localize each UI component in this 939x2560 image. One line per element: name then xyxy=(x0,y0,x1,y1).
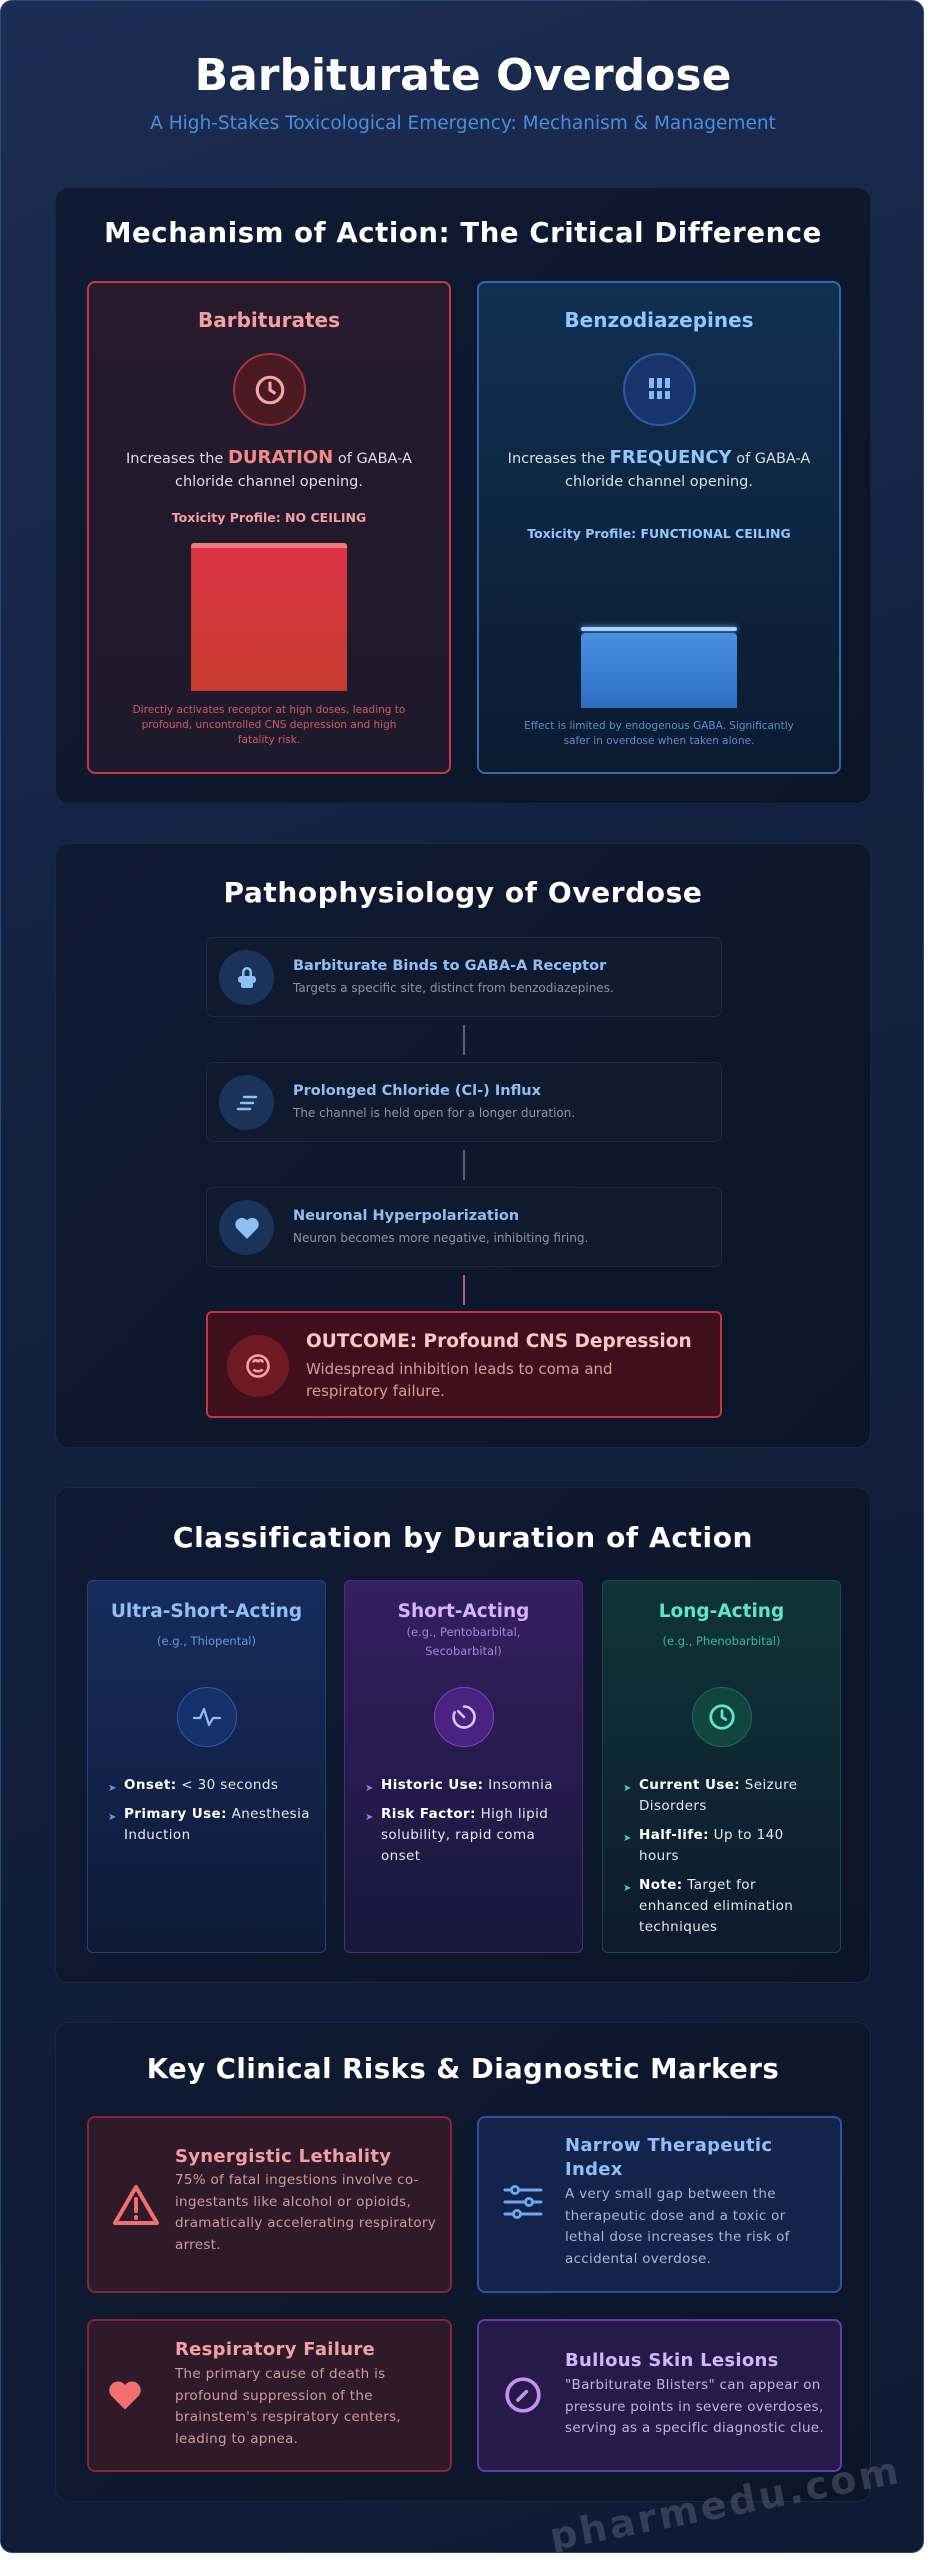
risk: synergistic lethality: 75% of fatal ingestions involve co-ingestants like alcohol or opioids, dramatically accelerating respiratory arrest. xyxy=(175,2172,436,2252)
card title: Barbiturates xyxy=(198,308,340,332)
risk: respiratory failure: Respiratory Failure xyxy=(175,2339,375,2360)
icon: timer xyxy=(434,1687,494,1747)
icon: clock xyxy=(692,1687,752,1747)
bullets xyxy=(624,1777,797,1935)
icon: sliders xyxy=(504,2185,542,2219)
bar: no ceiling xyxy=(191,543,347,691)
column: short: (e.g., Pentobarbital, xyxy=(407,1625,520,1639)
text: duration: Increases the DURATION of GABA-A xyxy=(126,447,412,468)
icon: lock xyxy=(219,950,274,1005)
note: Directly activates receptor at high doses, leading to profound, uncontrolled CNS depression and high fatality risk. xyxy=(133,704,405,746)
icon: warning xyxy=(112,2184,159,2225)
card title: Benzodiazepines xyxy=(564,308,754,332)
bullets: Half-life: Up to 140 hours xyxy=(639,1827,784,1864)
outcome box xyxy=(206,1311,722,1418)
bullets xyxy=(366,1777,553,1864)
icon: heart xyxy=(109,2382,141,2410)
risk: narrow therapeutic index: A very small gap between the therapeutic dose and a toxic or lethal dose increases the risk of accidental overdose. xyxy=(565,2186,790,2266)
step text: Prolonged Chloride (Cl-) Influx xyxy=(293,1083,541,1099)
note: Effect is limited by endogenous GABA. Significantly safer in overdose when taken alone. xyxy=(524,720,794,747)
bar: functional ceiling xyxy=(581,633,737,708)
icon: grid xyxy=(623,353,696,426)
step 3: Neuron becomes more negative, inhibiting firing. xyxy=(293,1231,588,1245)
toxicity label: Toxicity Profile: NO CEILING xyxy=(172,510,366,525)
icon: clock xyxy=(233,353,306,426)
outcome title: OUTCOME: Profound CNS Depression xyxy=(306,1331,692,1352)
icon: lines xyxy=(219,1075,274,1130)
column: long: (e.g., Phenobarbital) xyxy=(663,1634,780,1648)
risk: respiratory failure xyxy=(87,2319,452,2472)
ceiling line xyxy=(581,627,737,631)
risk: respiratory failure: The primary cause of death is profound suppression of the brainstem's respiratory centers, leading to apnea. xyxy=(175,2366,401,2446)
risk: bullous skin lesions xyxy=(477,2319,842,2472)
icon: brain xyxy=(227,1335,289,1397)
icon: heart xyxy=(219,1200,274,1255)
outcome text: Widespread inhibition leads to coma and respiratory failure. xyxy=(306,1360,613,1400)
toxicity label: Toxicity Profile: FUNCTIONAL CEILING xyxy=(527,526,791,541)
column: ultra-short xyxy=(87,1580,326,1953)
step 1: Targets a specific site, distinct from benzodiazepines. xyxy=(293,981,614,995)
bullets: Current Use: Seizure Disorders xyxy=(639,1777,797,1814)
card: benzodiazepines xyxy=(477,281,841,774)
risk: synergistic lethality: Synergistic Lethality xyxy=(175,2146,391,2167)
heading: risks: Key Clinical Risks & Diagnostic Markers xyxy=(147,2053,779,2085)
step 2: The channel is held open for a longer duration. xyxy=(293,1106,575,1120)
column: short xyxy=(344,1580,583,1953)
bullets: Onset: < 30 seconds xyxy=(124,1777,278,1793)
icon: pulse xyxy=(177,1687,237,1747)
panel: pathophysiology xyxy=(55,843,871,1448)
bullets: Primary Use: Anesthesia Induction xyxy=(124,1806,310,1843)
panel: clinical risks xyxy=(55,2022,871,2502)
risk: bullous skin lesions: "Barbiturate Blisters" can appear on pressure points in severe overdoses, serving as a specific diagnostic clue. xyxy=(565,2377,824,2436)
risk: bullous skin lesions: Bullous Skin Lesions xyxy=(565,2350,779,2371)
text: duration xyxy=(126,447,412,490)
bullets: Note: Target for enhanced elimination techniques xyxy=(639,1877,793,1935)
panel: mechanism of action xyxy=(55,187,871,804)
column: long xyxy=(602,1580,841,1953)
step 3 xyxy=(206,1187,722,1267)
panel: classification xyxy=(55,1487,871,1983)
bullets xyxy=(109,1777,310,1843)
step 1 xyxy=(206,937,722,1017)
icon: gauge xyxy=(505,2377,541,2413)
risk: synergistic lethality xyxy=(87,2116,452,2293)
risk: narrow therapeutic index: Narrow Therapeutic Index xyxy=(565,2135,772,2180)
risk: narrow therapeutic index xyxy=(477,2116,842,2293)
column: short: Secobarbital) xyxy=(425,1644,502,1658)
title: Barbiturate Overdose xyxy=(195,50,731,101)
card: barbiturates xyxy=(87,281,451,774)
text: frequency: Increases the FREQUENCY of GABA-A chloride channel opening. xyxy=(508,447,810,490)
column: ultra-short: Ultra-Short-Acting xyxy=(111,1601,302,1622)
text: duration: chloride channel opening. xyxy=(175,474,363,490)
bullets: Risk Factor: High lipid solubility, rapid coma onset xyxy=(381,1806,548,1864)
column: short: Short-Acting xyxy=(398,1601,529,1622)
heading: mechanism: Mechanism of Action: The Critical Difference xyxy=(104,217,822,249)
column: long: Long-Acting xyxy=(659,1601,784,1622)
step 2 xyxy=(206,1062,722,1142)
bullets: Historic Use: Insomnia xyxy=(381,1777,553,1793)
column: ultra-short: (e.g., Thiopental) xyxy=(157,1634,256,1648)
step text: Neuronal Hyperpolarization xyxy=(293,1208,519,1224)
step text: Barbiturate Binds to GABA-A Receptor xyxy=(293,958,606,974)
heading: pathophysiology: Pathophysiology of Overdose xyxy=(224,876,702,909)
subtitle: A High-Stakes Toxicological Emergency: Mechanism & Management xyxy=(150,113,776,134)
heading: classification: Classification by Duration of Action xyxy=(173,1521,753,1554)
